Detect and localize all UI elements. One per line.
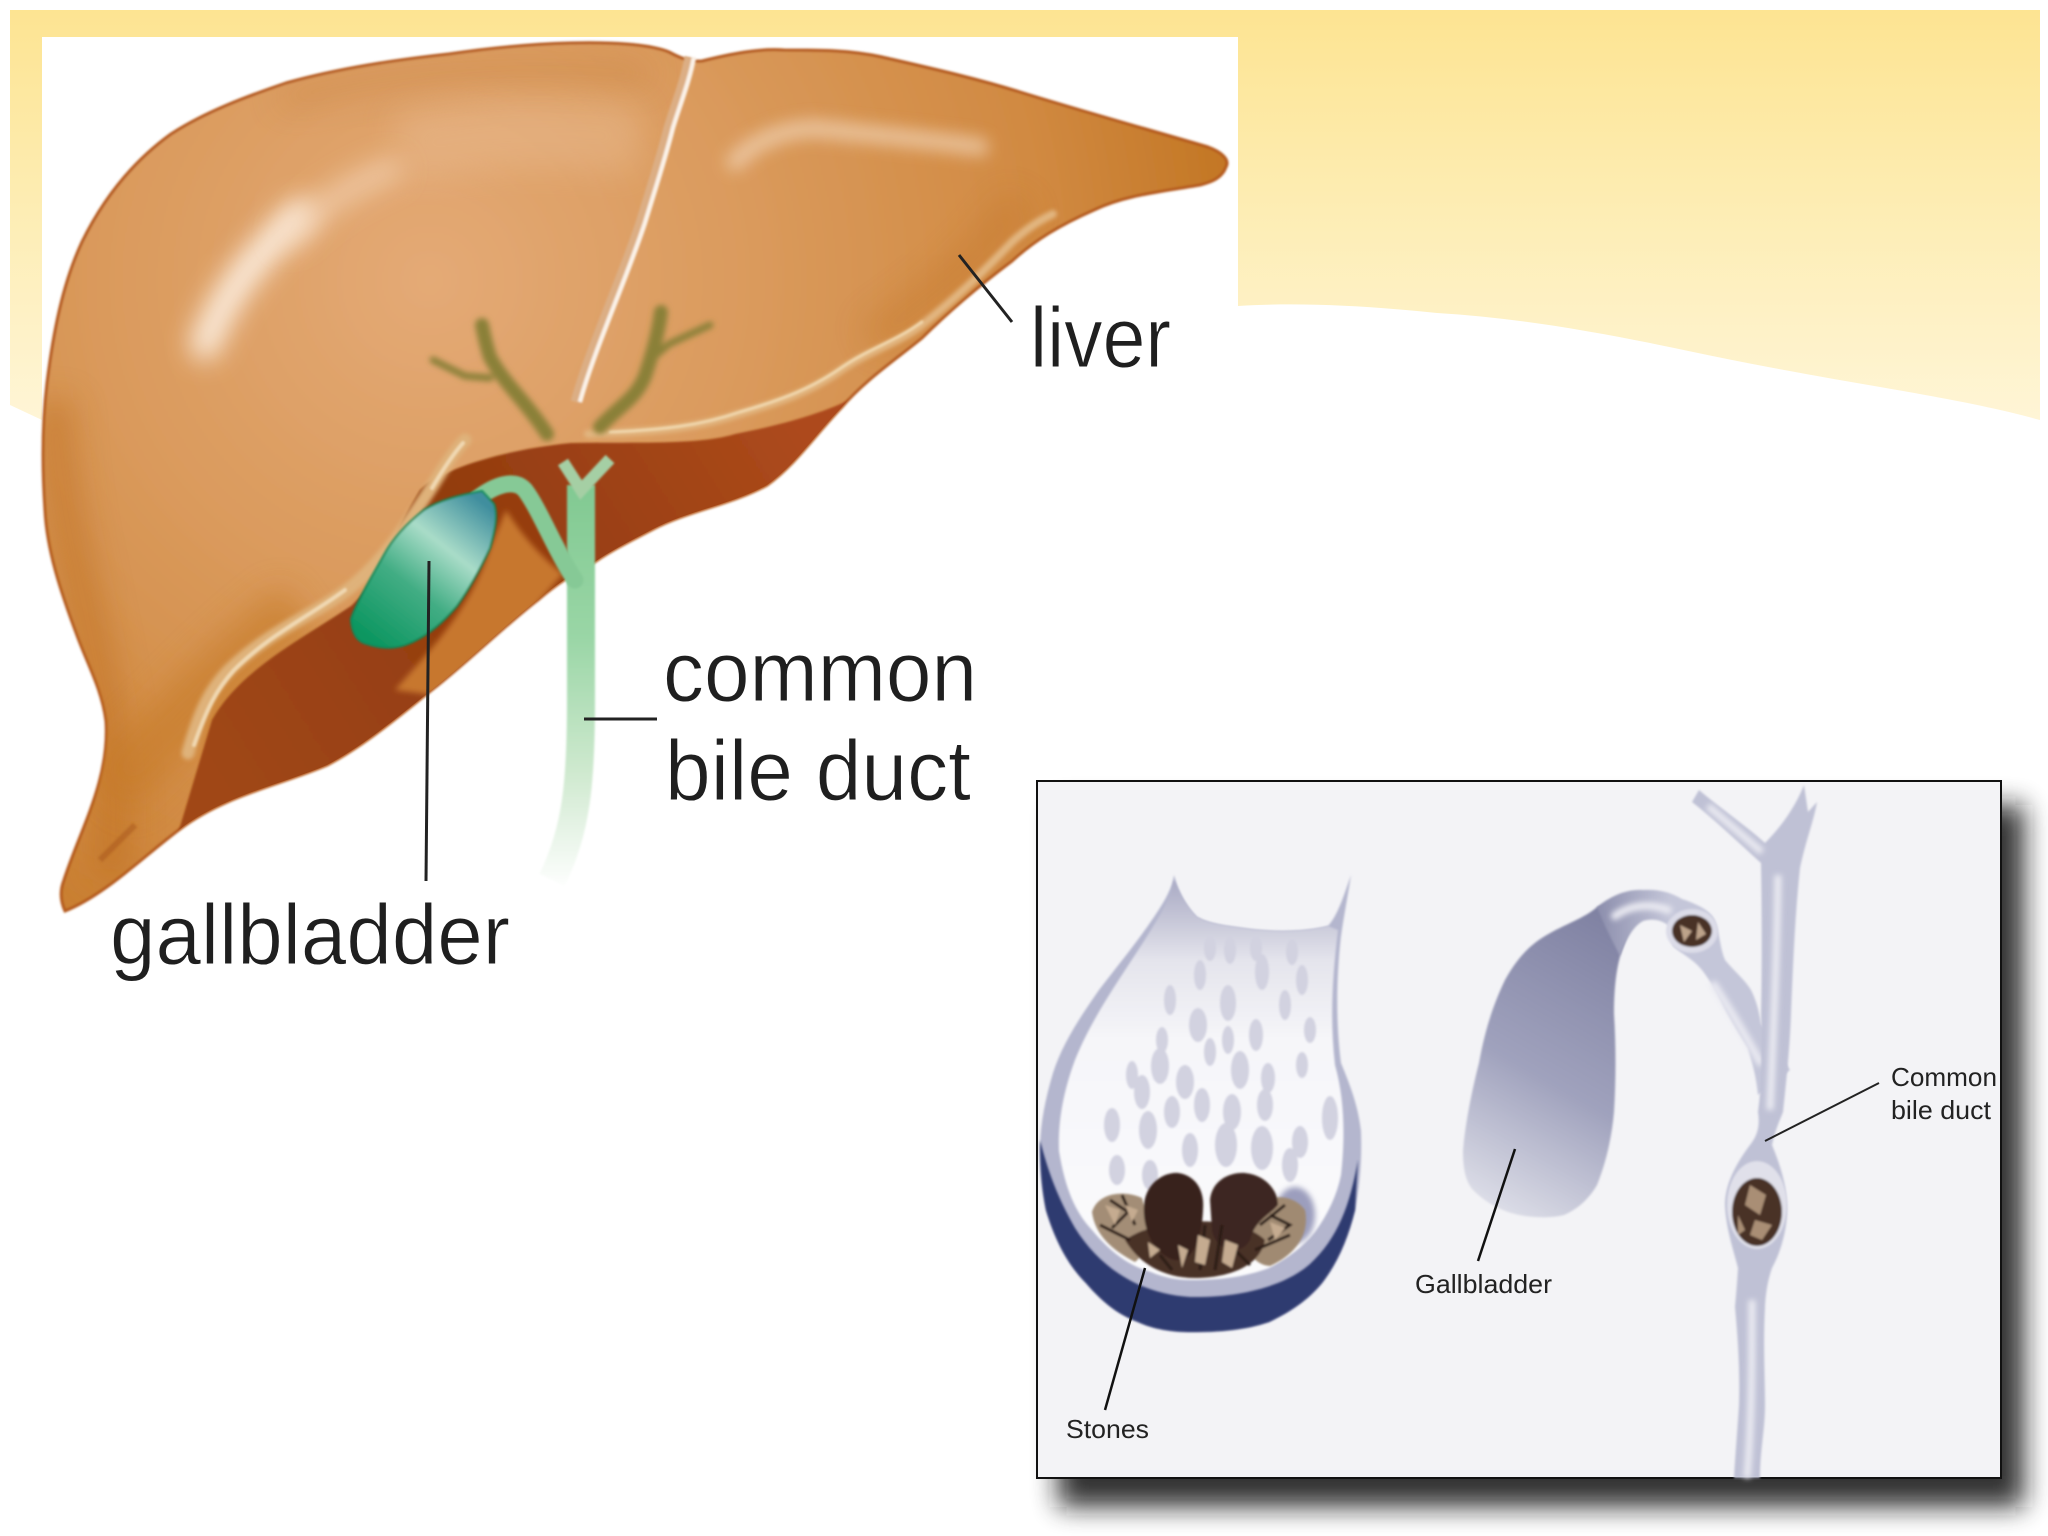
intact gallbladder with cystic duct bbox=[1463, 890, 1790, 1217]
cystic duct bbox=[1597, 890, 1790, 1095]
panel shadow bbox=[1058, 805, 2024, 1507]
label: Gallbladder bbox=[1415, 1149, 1552, 1299]
interior pits bbox=[1104, 935, 1338, 1190]
label: Common bile duct bbox=[1765, 1062, 1997, 1141]
liver underside bbox=[178, 400, 848, 830]
liver surface shading and highlights bbox=[55, 68, 1053, 880]
stones bbox=[1092, 1173, 1306, 1278]
falciform ligament bbox=[576, 57, 694, 402]
liver labels bbox=[110, 255, 1171, 983]
neck stone bbox=[1666, 909, 1718, 953]
common bile duct with stones bbox=[1666, 785, 1817, 1478]
yellow wave background band bbox=[10, 10, 2040, 420]
label: Common bile duct: bile duct bbox=[1891, 1095, 1992, 1125]
label: Common bile duct: Common bbox=[1891, 1062, 1997, 1092]
cystic duct bbox=[478, 484, 575, 580]
label: liver bbox=[959, 255, 1171, 386]
duct highlight bbox=[1708, 806, 1778, 1478]
panel background bbox=[1037, 781, 2001, 1478]
interior lining bbox=[1059, 880, 1343, 1280]
label: common bile duct: bile duct bbox=[665, 724, 971, 819]
panel: gallstones illustration bbox=[1037, 781, 2001, 1478]
white backing panel behind liver bbox=[42, 37, 1238, 1000]
intrahepatic bile ducts bbox=[433, 312, 710, 434]
label: liver: liver bbox=[1030, 291, 1171, 386]
label: common bile duct bbox=[584, 625, 977, 819]
gallbladder wall bbox=[1040, 875, 1361, 1332]
bile pool bbox=[1275, 1187, 1315, 1243]
lip highlights bbox=[188, 440, 465, 753]
liver body bbox=[43, 43, 1227, 911]
opened gallbladder with stones bbox=[1040, 875, 1361, 1332]
gallbladder bbox=[351, 491, 496, 648]
label: Stones bbox=[1066, 1268, 1149, 1444]
hepatic duct fork bbox=[563, 459, 610, 490]
label: common bile duct: common bbox=[663, 625, 977, 720]
duct tube bbox=[1692, 785, 1817, 1478]
label: gallbladder: gallbladder bbox=[110, 888, 510, 983]
gallbladder sac bbox=[1463, 900, 1640, 1217]
quadrate lobe patch bbox=[395, 510, 563, 695]
label: Gallbladder: Gallbladder bbox=[1415, 1269, 1552, 1299]
label: Stones: Stones bbox=[1066, 1414, 1149, 1444]
common bile duct bbox=[552, 485, 581, 880]
navy outer crescent bbox=[1040, 1140, 1358, 1332]
liver illustration bbox=[43, 43, 1227, 911]
bulge stone bbox=[1727, 1161, 1787, 1249]
label: gallbladder bbox=[110, 561, 510, 983]
